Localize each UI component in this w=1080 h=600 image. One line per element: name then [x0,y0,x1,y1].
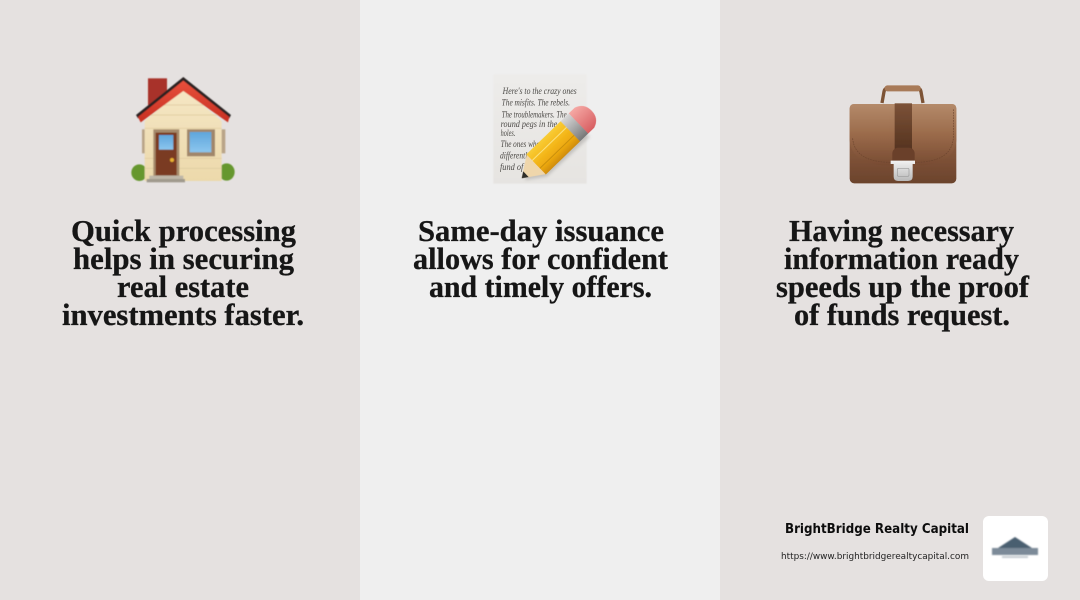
heading: necessary information: Having necessary [789,213,1014,248]
heading: quick processing: Quick processing [71,213,296,248]
brand footer [781,516,1048,581]
heading: same-day issuance [413,213,669,304]
icon: note and pencil: round pegs in the [501,119,557,129]
icon: house [131,77,235,182]
icon: briefcase [850,85,956,183]
heading: quick processing: real estate [117,269,249,304]
heading: necessary information: information ready [784,241,1019,276]
brand name: BrightBridge Realty Capital [785,522,969,537]
panel: necessary information [720,0,1080,600]
heading: quick processing [62,213,304,332]
brand url: https://www.brightbridgerealtycapital.com [781,552,969,562]
icon: note and pencil: The ones who [501,139,540,149]
logo [983,516,1048,581]
icon: note and pencil: The misfits. The rebels. [502,98,570,108]
panel: same-day issuance [360,0,720,600]
heading: necessary information: speeds up the proof [776,269,1030,304]
icon: note and pencil: fund of [500,162,525,172]
heading: necessary information: of funds request. [794,297,1010,332]
heading: quick processing: investments faster. [62,297,304,332]
heading: same-day issuance: Same-day issuance [418,213,664,248]
heading: quick processing: helps in securing [73,241,294,276]
icon: note and pencil: Here's to the crazy ones [502,86,577,96]
icon: note and pencil: The troublemakers. The [502,109,567,119]
heading: necessary information [776,213,1030,332]
panel: quick processing [0,0,360,600]
heading: same-day issuance: allows for confident [413,241,669,276]
icon: note and pencil [493,74,601,188]
icon: note and pencil: holes. [501,128,515,138]
icon: note and pencil: differently [500,150,531,160]
heading: same-day issuance: and timely offers. [429,269,652,304]
